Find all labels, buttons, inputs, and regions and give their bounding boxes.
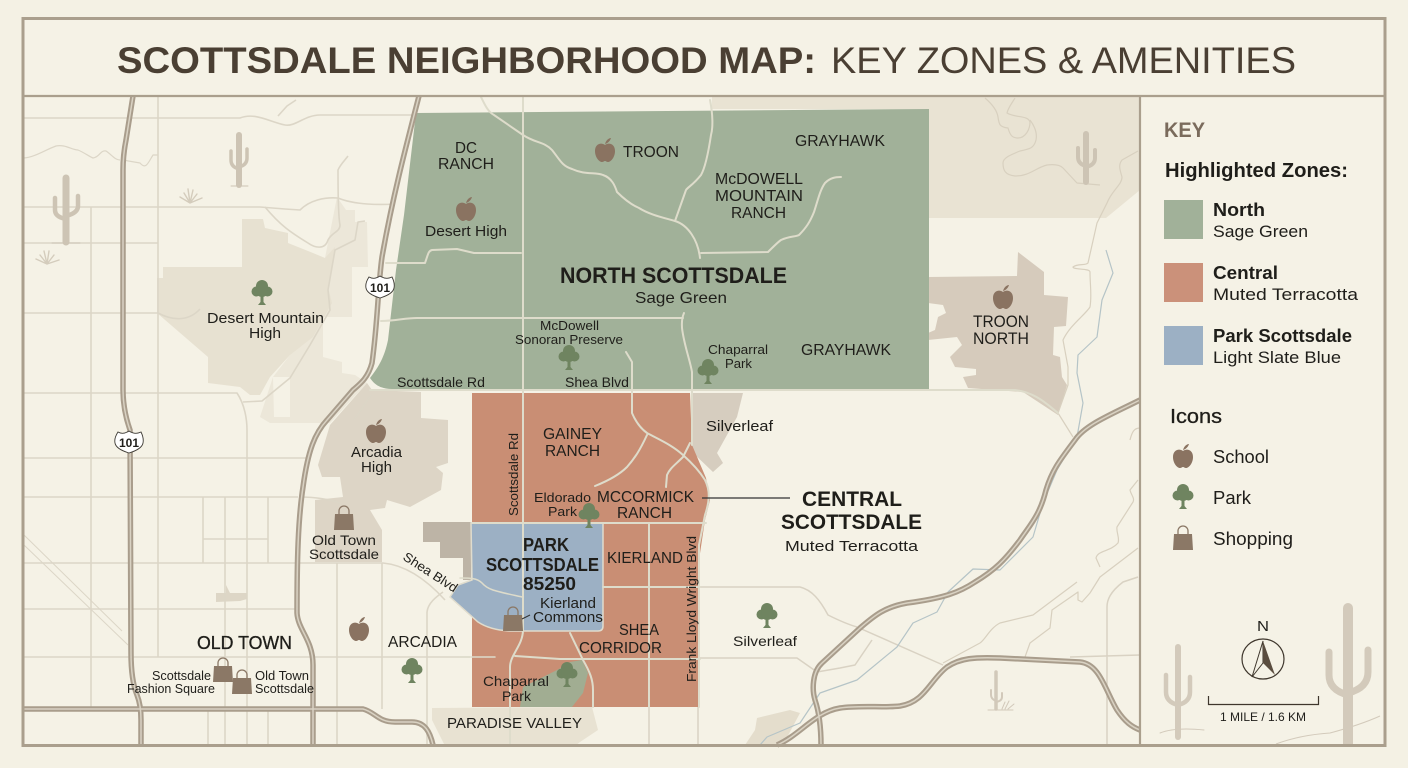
labels: west and east map: Scottsdale bbox=[152, 669, 211, 683]
icon: cactus small panel bbox=[1160, 647, 1204, 737]
labels: north zone: RANCH bbox=[731, 205, 786, 222]
panel: legend bbox=[1141, 97, 1385, 745]
zone: Park Scottsdale bbox=[450, 523, 603, 631]
labels: central zone: Kierland bbox=[540, 596, 596, 612]
labels: north zone: RANCH bbox=[438, 156, 494, 173]
zone: North Scottsdale bbox=[370, 109, 929, 389]
labels: central zone: Shea Blvd bbox=[400, 549, 461, 595]
legend heading: KEY bbox=[1164, 119, 1205, 142]
icon: cactus left bbox=[52, 178, 80, 243]
labels: central zone: Scottsdale Rd bbox=[506, 433, 521, 516]
labels: north zone: Desert High bbox=[425, 224, 507, 240]
labels: west and east map: ARCADIA bbox=[388, 634, 457, 651]
labels: west and east map: Fashion Square bbox=[127, 682, 215, 696]
heading: Park Scottsdale: SCOTTSDALE bbox=[486, 555, 599, 575]
labels: north zone: Chaparral bbox=[708, 343, 768, 357]
labels: west and east map: Desert Mountain bbox=[207, 310, 324, 327]
streams: tan bbox=[943, 98, 1140, 663]
heading: Park Scottsdale: PARK bbox=[523, 535, 569, 555]
area: Arcadia bbox=[315, 383, 448, 562]
labels: west and east map: Old Town bbox=[255, 669, 309, 683]
legend item: Park Scottsdale: Park Scottsdale bbox=[1213, 326, 1352, 346]
legend item: School bbox=[1173, 444, 1269, 468]
legend item: North: North bbox=[1213, 200, 1265, 220]
heading: Central Scottsdale: SCOTTSDALE bbox=[781, 511, 922, 534]
labels: central zone: GAINEY bbox=[543, 426, 602, 443]
icon: cactus large panel bbox=[1276, 603, 1380, 744]
stream: blue bbox=[760, 250, 1113, 745]
heading: Park Scottsdale bbox=[486, 535, 599, 594]
streets: left grid bbox=[24, 96, 470, 745]
area: Old Town small block bbox=[216, 585, 247, 602]
labels: north zone: DC bbox=[455, 140, 477, 157]
labels: central zone: KIERLAND bbox=[607, 550, 683, 567]
icon: small cactus and agave bbox=[988, 672, 1014, 710]
icons: shopping bbox=[213, 506, 523, 694]
heading: Park Scottsdale: 85250 bbox=[523, 574, 576, 594]
title: KEY ZONES & AMENITIES bbox=[831, 39, 1296, 81]
legend item: Central bbox=[1164, 263, 1359, 304]
streets: zone roads bbox=[370, 96, 1058, 745]
legend item: Shopping bbox=[1173, 526, 1293, 550]
labels: central zone: Park bbox=[548, 504, 578, 519]
icon: highway 101 shield north bbox=[366, 276, 394, 298]
labels: north zone bbox=[397, 133, 891, 390]
legend item: Park bbox=[1172, 484, 1252, 509]
icon: cactus centre bbox=[231, 135, 248, 186]
labels: central zone: Park bbox=[502, 688, 532, 704]
icon: agave one bbox=[180, 189, 202, 203]
labels: north zone: MOUNTAIN bbox=[715, 188, 803, 205]
legend item: Park: Park bbox=[1213, 488, 1252, 508]
area: Desert Mountain bbox=[157, 219, 335, 395]
labels: north zone: Scottsdale Rd bbox=[397, 374, 485, 390]
legend item: North bbox=[1164, 200, 1308, 241]
legend item: Central: Muted Terracotta bbox=[1213, 285, 1359, 304]
labels: west and east map: Silverleaf bbox=[733, 633, 797, 649]
title: SCOTTSDALE NEIGHBORHOOD MAP: bbox=[117, 39, 816, 81]
heading: Central Scottsdale bbox=[781, 488, 922, 555]
labels: central zone: CORRIDOR bbox=[579, 640, 662, 657]
labels: central zone: SHEA bbox=[619, 622, 659, 639]
legend item: Park Scottsdale: Light Slate Blue bbox=[1213, 348, 1341, 367]
zone: Central Scottsdale bbox=[472, 393, 710, 707]
heading: North Scottsdale: Sage Green bbox=[635, 290, 727, 307]
heading: North Scottsdale bbox=[560, 263, 787, 307]
labels: north zone: McDOWELL bbox=[715, 171, 803, 188]
scale bar: 1 MILE / 1.6 KM bbox=[1220, 710, 1306, 724]
area: Paradise Valley bbox=[432, 707, 598, 746]
icon: highway 101 shield north: 101 bbox=[370, 281, 390, 295]
leader: Central Scottsdale bbox=[702, 497, 790, 499]
area: Old Town notch bbox=[423, 522, 471, 580]
icon: highway 101 shield west bbox=[115, 431, 143, 453]
icons: parks bbox=[252, 280, 778, 687]
labels: central zone: RANCH bbox=[617, 505, 672, 522]
labels: west and east map bbox=[127, 310, 1029, 696]
legend subheading: icons: Icons bbox=[1170, 406, 1222, 428]
heading: Central Scottsdale: Muted Terracotta bbox=[785, 538, 919, 555]
road: Highway 101 bbox=[24, 96, 1140, 745]
area: Troon North bbox=[928, 252, 1068, 415]
area: lower blob bbox=[745, 710, 800, 745]
labels: central zone: MCCORMICK bbox=[597, 489, 694, 506]
labels: north zone: McDowell bbox=[540, 319, 599, 333]
legend item: School: School bbox=[1213, 447, 1269, 467]
labels: west and east map: Silverleaf bbox=[706, 419, 774, 435]
labels: north zone: Sonoran Preserve bbox=[515, 333, 623, 347]
leader: Kierland Commons bbox=[522, 615, 530, 619]
labels: central zone: RANCH bbox=[545, 443, 600, 460]
heading: Central Scottsdale: CENTRAL bbox=[802, 488, 902, 511]
labels: central zone: Frank Lloyd Wright Blvd bbox=[684, 536, 699, 682]
icon: highway 101 shield west: 101 bbox=[119, 436, 139, 450]
labels: north zone: GRAYHAWK bbox=[795, 133, 885, 150]
panel: title bar bbox=[24, 20, 1386, 96]
labels: west and east map: Arcadia bbox=[351, 444, 403, 461]
icon: agave two bbox=[36, 251, 59, 264]
icon: north arrow bbox=[1242, 618, 1284, 679]
labels: west and east map: High bbox=[361, 459, 392, 476]
area: Silverleaf bbox=[690, 393, 743, 472]
legend item: Central: Central bbox=[1213, 263, 1278, 283]
panel: map bbox=[24, 96, 1140, 746]
area: top right desert bbox=[712, 96, 1140, 218]
labels: north zone: Shea Blvd bbox=[565, 374, 629, 390]
labels: west and east map: High bbox=[249, 325, 281, 342]
labels: north zone: GRAYHAWK bbox=[801, 342, 891, 359]
labels: west and east map: Scottsdale bbox=[309, 546, 379, 562]
scale bar bbox=[1208, 696, 1318, 724]
icon: cactus top right bbox=[1078, 134, 1095, 182]
labels: north zone: Park bbox=[725, 357, 753, 371]
area: Desert Mountain light fringe bbox=[260, 197, 368, 423]
legend item: North: Sage Green bbox=[1213, 222, 1308, 241]
area: Chaparral Park green bbox=[520, 660, 588, 707]
icon: north arrow: N bbox=[1257, 618, 1269, 635]
heading: North Scottsdale: NORTH SCOTTSDALE bbox=[560, 263, 787, 288]
legend item: Shopping: Shopping bbox=[1213, 529, 1293, 549]
labels: central zone: Chaparral bbox=[483, 673, 549, 689]
legend item: Park Scottsdale bbox=[1164, 326, 1352, 367]
labels: west and east map: NORTH bbox=[973, 330, 1029, 348]
labels: central zone: Commons bbox=[533, 610, 603, 626]
labels: north zone: TROON bbox=[623, 144, 679, 161]
labels: central zone: PARADISE VALLEY bbox=[447, 715, 582, 732]
legend subheading: zones: Highlighted Zones: bbox=[1165, 160, 1348, 182]
labels: central zone bbox=[400, 426, 699, 732]
streets: east side bbox=[649, 577, 1140, 745]
labels: west and east map: Old Town bbox=[312, 532, 376, 548]
icons: schools bbox=[349, 138, 1013, 641]
labels: west and east map: TROON bbox=[973, 313, 1029, 331]
labels: west and east map: Scottsdale bbox=[255, 682, 314, 696]
labels: west and east map: OLD TOWN bbox=[197, 633, 292, 653]
labels: central zone: Eldorado bbox=[534, 490, 591, 505]
